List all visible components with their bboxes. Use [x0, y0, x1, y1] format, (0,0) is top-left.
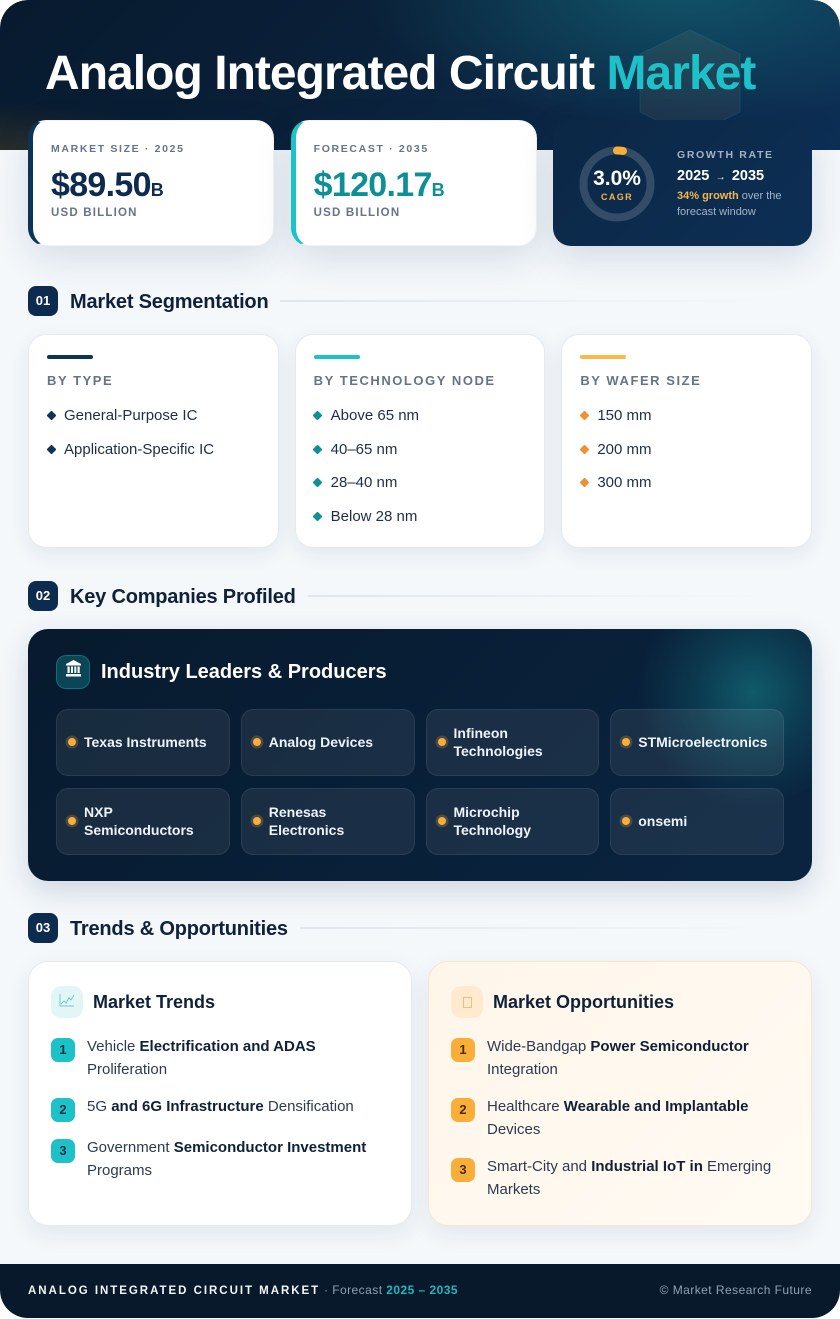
panel: by wafer size: BY WAFER SIZE [580, 373, 701, 388]
opportunity 2: Healthcare Wearable and Implantable Devices [487, 1098, 748, 1138]
company: Infineon Technologies: Infineon Technologies [454, 725, 543, 759]
title: Analog Integrated Circuit Market [45, 47, 755, 100]
decorative hexagon [640, 30, 740, 120]
panel: by wafer size: 200 mm [597, 441, 652, 458]
company: onsemi [610, 788, 784, 855]
icon: opportunity [451, 986, 483, 1018]
company: onsemi: onsemi [638, 813, 687, 829]
header band [0, 0, 840, 150]
trend 1: Vehicle Electrification and ADAS Proliferation [87, 1038, 316, 1078]
CAGR value: 3.0% [593, 167, 641, 190]
panel: market opportunities [428, 961, 812, 1226]
section heading: key companies: Key Companies Profiled [70, 586, 296, 608]
panel: by wafer size: 300 mm [597, 474, 652, 491]
opportunity 1: Wide-Bandgap Power Semiconductor Integration [487, 1038, 749, 1078]
company: STMicroelectronics [610, 708, 784, 776]
panel: by technology node: Below 28 nm [331, 508, 417, 525]
panel: by wafer size [561, 334, 812, 548]
stat card: market size: MARKET SIZE · 2025 [51, 142, 185, 154]
stat card: forecast: USD BILLION [314, 207, 400, 219]
panel: market opportunities: 1 [459, 1042, 467, 1057]
panel: market trends: 3 [59, 1143, 67, 1158]
icon: institution [56, 655, 90, 689]
panel: by technology node: 28–40 nm [331, 474, 397, 491]
panel: by type [28, 334, 279, 548]
panel: market trends [28, 961, 412, 1226]
stat card: forecast: $120.17B [314, 166, 445, 204]
company: Texas Instruments [56, 708, 230, 776]
panel: by type: Application-Specific IC [64, 441, 214, 458]
company: STMicroelectronics: STMicroelectronics [638, 734, 767, 750]
card heading: Market Trends [93, 992, 215, 1012]
icon: chart [51, 986, 83, 1018]
panel: by type: BY TYPE [47, 373, 113, 388]
panel: industry leaders [28, 629, 812, 881]
company: Renesas Electronics [241, 788, 414, 855]
panel: by type: General-Purpose IC [64, 407, 197, 424]
trend 2: 5G and 6G Infrastructure Densification [87, 1098, 354, 1115]
stat card: CAGR [553, 120, 812, 246]
section heading: market segmentation: Market Segmentation [70, 290, 268, 312]
company: Texas Instruments: Texas Instruments [84, 734, 207, 750]
footer [0, 1264, 840, 1318]
card heading: Market Opportunities [493, 992, 674, 1012]
growth years: → [716, 172, 726, 183]
section heading: market segmentation [28, 286, 582, 316]
stat card: market size [28, 120, 274, 246]
company: Infineon Technologies [426, 708, 599, 776]
panel: by technology node [295, 334, 545, 548]
section heading: key companies [28, 581, 592, 611]
section heading: key companies: 02 [36, 588, 50, 603]
CAGR label: CAGR [601, 192, 633, 202]
panel: by wafer size: 150 mm [597, 407, 652, 424]
growth rate label: GROWTH RATE [677, 148, 774, 160]
company: Analog Devices: Analog Devices [269, 734, 373, 750]
growth note: 34% growth over the forecast window [677, 190, 782, 218]
growth years: 2025 2035 [677, 168, 764, 184]
footer title: ANALOG INTEGRATED CIRCUIT MARKET · Forecast 2025 – 2035 [28, 1283, 458, 1297]
panel: by technology node: BY TECHNOLOGY NODE [314, 373, 496, 388]
company: Microchip Technology: Microchip Technology [454, 804, 531, 838]
company: NXP Semiconductors [56, 788, 230, 855]
trend 3: Government Semiconductor Investment Programs [87, 1139, 366, 1178]
panel: market trends: 1 [59, 1042, 67, 1057]
company: Renesas Electronics: Renesas Electronics [269, 804, 344, 838]
company: NXP Semiconductors: NXP Semiconductors [84, 804, 194, 838]
company: Microchip Technology [426, 788, 599, 855]
section heading: market segmentation: 01 [36, 293, 50, 308]
panel: market opportunities: 3 [459, 1162, 467, 1177]
company: Analog Devices [241, 708, 414, 776]
section heading: trends and opportunities: Trends & Opportunities [70, 918, 288, 940]
section heading: trends and opportunities: 03 [36, 920, 50, 935]
CAGR ring [580, 146, 654, 222]
panel: market opportunities: 2 [459, 1102, 467, 1117]
panel: by technology node: Above 65 nm [331, 407, 419, 424]
panel heading: Industry Leaders & Producers [101, 661, 387, 683]
panel: by technology node: 40–65 nm [331, 441, 397, 458]
footer credit: © Market Research Future [660, 1283, 812, 1297]
panel: market trends: 2 [59, 1102, 67, 1117]
section heading: trends and opportunities [28, 913, 590, 943]
stat card: market size: $89.50B [51, 166, 164, 204]
stat card: market size: USD BILLION [51, 207, 138, 219]
stat card: forecast [291, 120, 537, 246]
stat card: forecast: FORECAST · 2035 [314, 142, 429, 154]
opportunity 3: Smart-City and Industrial IoT in Emerging Markets [487, 1158, 771, 1198]
